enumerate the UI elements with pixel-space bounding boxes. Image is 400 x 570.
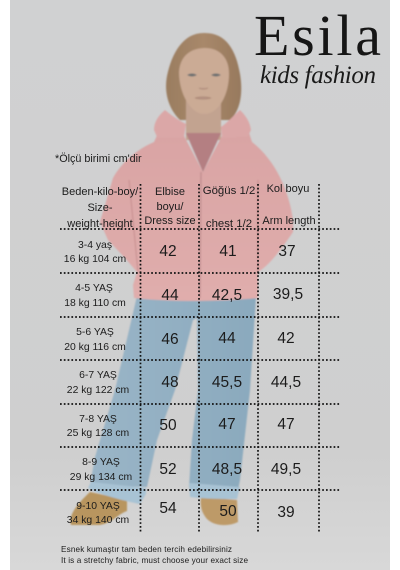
brand tagline: kids fashion: [260, 62, 376, 89]
zipper: [200, 172, 201, 298]
table values: 46: [161, 331, 179, 348]
table values: 48,5: [212, 461, 242, 478]
row labels: 29 kg 134 cm: [70, 472, 132, 483]
table grid: [60, 184, 340, 532]
row labels: 18 kg 110 cm: [64, 298, 126, 309]
face: [179, 48, 229, 114]
table values: 50: [159, 417, 177, 434]
table header: weight-height: [66, 218, 133, 230]
pink jacket: [100, 118, 293, 301]
table values: 54: [159, 500, 177, 517]
table values: 44: [161, 287, 179, 304]
table header: boyu/: [157, 201, 184, 213]
table values: 39: [277, 504, 295, 521]
table header: Göğüs 1/2: [203, 185, 255, 197]
brand title: Esila: [254, 3, 381, 68]
table values: 39,5: [273, 286, 303, 303]
table header: Size-: [87, 202, 113, 214]
table header: Elbise: [155, 186, 185, 198]
eyes: [187, 74, 221, 76]
table header: Beden-kilo-boy/: [62, 186, 139, 198]
footer note: It is a stretchy fabric, must choose your exact size: [61, 556, 248, 565]
row labels: 4-5 YAŞ: [75, 283, 113, 294]
row labels: 7-8 YAŞ: [79, 414, 117, 425]
table values: [159, 243, 303, 521]
table header: Arm length: [262, 215, 316, 227]
jeans: [90, 296, 256, 490]
table values: 47: [277, 416, 295, 433]
jacket seams: [129, 180, 258, 272]
nose and mouth: [195, 88, 211, 99]
photo: girl model: [70, 33, 293, 525]
table values: 52: [159, 461, 177, 478]
table values: 41: [219, 243, 237, 260]
footer note: Esnek kumaştır tam beden tercih edebilirsiniz: [61, 545, 232, 554]
row labels: 3-4 yaş: [78, 240, 112, 251]
neck: [186, 100, 221, 140]
row labels: 25 kg 128 cm: [67, 428, 129, 439]
unit note: *Ölçü birimi cm'dir: [55, 153, 142, 165]
jeans cuffs: [88, 482, 240, 504]
row labels: [64, 240, 132, 526]
row labels: 22 kg 122 cm: [67, 385, 129, 396]
footer note: [61, 545, 248, 565]
table header: chest 1/2: [206, 218, 252, 230]
table values: 37: [278, 243, 296, 260]
table values: 47: [218, 416, 236, 433]
inner top: [186, 133, 221, 172]
table values: 48: [161, 374, 179, 391]
row labels: 16 kg 104 cm: [64, 254, 126, 265]
table values: 42: [277, 330, 295, 347]
collar: [154, 110, 251, 138]
table values: 44,5: [271, 374, 301, 391]
table header: Dress size: [144, 215, 196, 227]
table values: 49,5: [271, 461, 301, 478]
icon: left shoe: [70, 492, 127, 525]
table values: 42: [159, 243, 177, 260]
hair back: [166, 33, 241, 120]
row labels: 6-7 YAŞ: [79, 370, 117, 381]
table values: 42,5: [212, 287, 242, 304]
row labels: 34 kg 140 cm: [67, 515, 129, 526]
table values: 45,5: [212, 374, 242, 391]
row labels: 8-9 YAŞ: [82, 457, 120, 468]
table header: [62, 183, 316, 230]
table header: Kol boyu: [267, 183, 309, 195]
table values: 44: [218, 330, 236, 347]
row labels: 20 kg 116 cm: [64, 342, 126, 353]
table values: 50: [219, 503, 237, 520]
row labels: 5-6 YAŞ: [76, 327, 114, 338]
icon: right shoe: [201, 497, 238, 525]
row labels: 9-10 YAŞ: [76, 501, 120, 512]
